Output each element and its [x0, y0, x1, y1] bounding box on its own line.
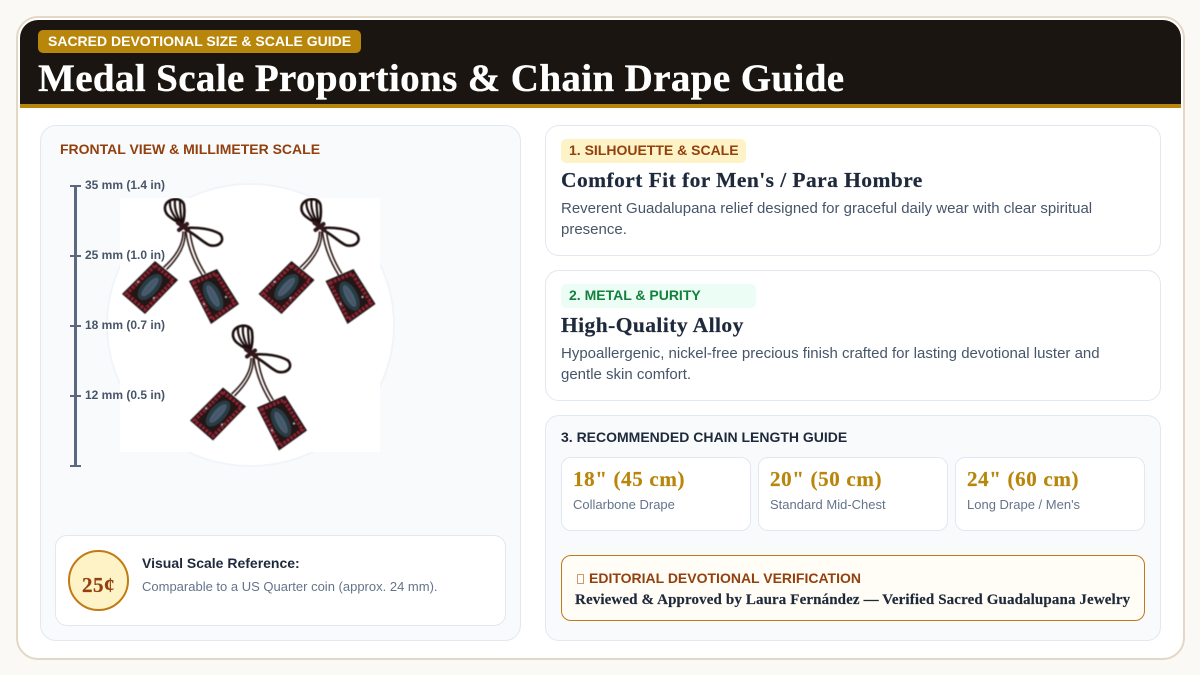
header band — [20, 20, 1181, 108]
chain option 20 in: 20" (50 cm) — [770, 467, 882, 491]
coin reference heading: Visual Scale Reference: — [142, 555, 300, 571]
coin reference card — [55, 535, 506, 626]
verification text: Reviewed & Approved by Laura Fernández — Verified Sacred Guadalupana Jewelry — [575, 592, 1130, 608]
chip: silhouette — [561, 139, 746, 163]
header badge: SACRED DEVOTIONAL SIZE & SCALE GUIDE — [48, 33, 351, 49]
description: silhouette: Reverent Guadalupana relief designed for graceful daily wear with clear spiritual — [561, 200, 1092, 217]
icon: quarter coin — [68, 550, 129, 611]
tick 35 mm — [70, 185, 81, 187]
tick 18 mm — [70, 325, 81, 327]
tick 25 mm — [70, 255, 81, 257]
label 35 mm: 35 mm (1.4 in) — [85, 178, 165, 192]
chain option 18 in: Collarbone Drape — [573, 497, 675, 512]
panel: silhouette and scale — [545, 125, 1161, 256]
title: Medal Scale Proportions & Chain Drape Guide — [38, 57, 844, 100]
chip: silhouette: 1. SILHOUETTE & SCALE — [569, 142, 739, 158]
chain option 24 in: Long Drape / Men's — [967, 497, 1080, 512]
heading: alloy: High-Quality Alloy — [561, 313, 744, 337]
medal set 3 — [190, 326, 307, 450]
description: metal: gentle skin comfort. — [561, 366, 691, 383]
panel: frontal view and scale — [40, 125, 521, 641]
label 25 mm: 25 mm (1.0 in) — [85, 248, 165, 262]
chip: metal — [561, 284, 756, 308]
callout: editorial verification — [561, 555, 1145, 621]
description: metal: Hypoallergenic, nickel-free precious finish crafted for lasting devotional luster and — [561, 345, 1100, 362]
chain option 20 in: Standard Mid-Chest — [770, 497, 886, 512]
millimeter ruler — [74, 187, 77, 465]
product image: three scapular medals — [120, 198, 380, 452]
icon: missing-glyph box — [577, 574, 584, 584]
chain option 24 in: 24" (60 cm) — [967, 467, 1079, 491]
chain option 18 in — [561, 457, 751, 531]
header badge — [38, 30, 361, 53]
medal set 2 — [258, 199, 376, 324]
chain option 20 in — [758, 457, 948, 531]
chain option 24 in — [955, 457, 1145, 531]
panel: chain length guide — [545, 415, 1161, 641]
chain guide heading: 3. RECOMMENDED CHAIN LENGTH GUIDE — [561, 429, 847, 445]
tick base — [70, 465, 81, 467]
description: silhouette — [561, 200, 1092, 238]
description: silhouette: presence. — [561, 221, 627, 238]
icon: quarter coin: 25¢ — [82, 573, 115, 597]
label 12 mm: 12 mm (0.5 in) — [85, 388, 165, 402]
description: metal — [561, 345, 1100, 383]
label 18 mm: 18 mm (0.7 in) — [85, 318, 165, 332]
panel: metal and purity — [545, 270, 1161, 401]
heading: comfort fit: Comfort Fit for Men's / Para Hombre — [561, 168, 923, 192]
panel heading: frontal view: FRONTAL VIEW & MILLIMETER SCALE — [60, 141, 320, 157]
chain option 18 in: 18" (45 cm) — [573, 467, 685, 491]
tick 12 mm — [70, 395, 81, 397]
medal backdrop circle — [106, 183, 395, 467]
coin reference text: Comparable to a US Quarter coin (approx. 24 mm). — [142, 579, 438, 594]
medal set 1 — [122, 199, 239, 324]
verification heading: EDITORIAL DEVOTIONAL VERIFICATION — [589, 570, 861, 586]
chip: metal: 2. METAL & PURITY — [569, 287, 701, 303]
